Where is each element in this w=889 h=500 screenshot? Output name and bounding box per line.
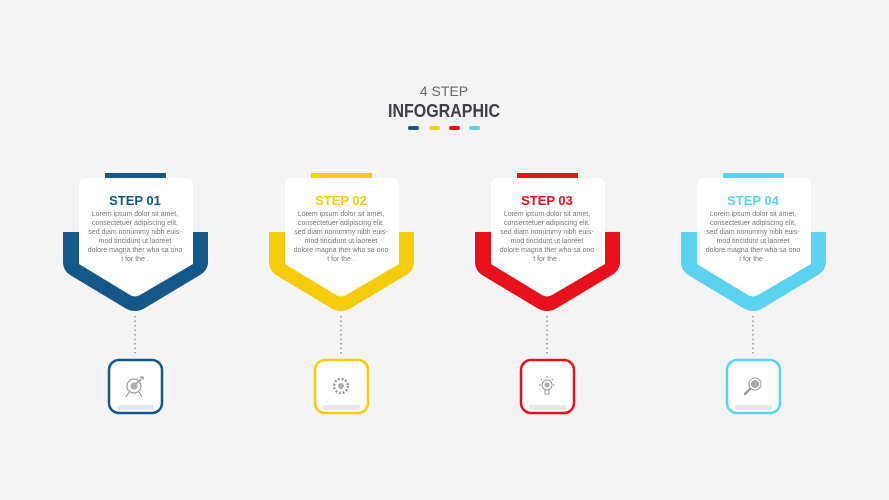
title: [388, 83, 500, 121]
panel: step 02: [269, 173, 414, 413]
panel: step 04: consectetuer adipiscing elit,: [710, 220, 796, 227]
panel: step 01: mod tincidunt ut laoreet: [99, 238, 171, 245]
panel: step 01: dolore magna ther wha sa ono: [88, 247, 182, 254]
panel: step 01: t for the .: [121, 256, 149, 263]
title: 4 STEP: [420, 83, 468, 99]
panel: step 01: STEP 01: [109, 193, 161, 208]
panel: step 03: t for the .: [533, 256, 561, 263]
panel: step 02: dolore magna ther wha sa ono: [294, 247, 388, 254]
panel: step 03: [475, 173, 620, 413]
panel: step 02: t for the .: [327, 256, 355, 263]
panel: step 04: STEP 04: [727, 193, 780, 208]
panel: step 03: Lorem ipsum dolor sit amet,: [504, 211, 590, 218]
panel: step 02: sed diam nonummy nibh euis-: [294, 229, 388, 236]
panel: step 02: STEP 02: [315, 193, 367, 208]
panel: step 03: mod tincidunt ut laoreet: [511, 238, 583, 245]
panel: step 04: t for the .: [739, 256, 767, 263]
panel: step 02: Lorem ipsum dolor sit amet,: [298, 211, 384, 218]
panel: step 03: sed diam nonummy nibh euis-: [500, 229, 594, 236]
panel: step 04: Lorem ipsum dolor sit amet,: [710, 211, 796, 218]
panel: step 04: [681, 173, 826, 413]
panel: step 02: consectetuer adipiscing elit,: [298, 220, 384, 227]
panel: step 01: consectetuer adipiscing elit,: [92, 220, 178, 227]
panel: step 04: dolore magna ther wha sa ono: [706, 247, 800, 254]
panel: step 03: dolore magna ther wha sa ono: [500, 247, 594, 254]
panel: step 03: STEP 03: [521, 193, 573, 208]
panel: step 04: sed diam nonummy nibh euis-: [706, 229, 800, 236]
panel: step 02: mod tincidunt ut laoreet: [305, 238, 377, 245]
panel: step 04: mod tincidunt ut laoreet: [717, 238, 789, 245]
panel: step 01: sed diam nonummy nibh euis-: [88, 229, 182, 236]
panel: step 01: [63, 173, 208, 413]
title: INFOGRAPHIC: [388, 101, 500, 121]
panel: step 01: Lorem ipsum dolor sit amet,: [92, 211, 178, 218]
legend dashes: [408, 126, 480, 130]
panel: step 03: consectetuer adipiscing elit,: [504, 220, 590, 227]
